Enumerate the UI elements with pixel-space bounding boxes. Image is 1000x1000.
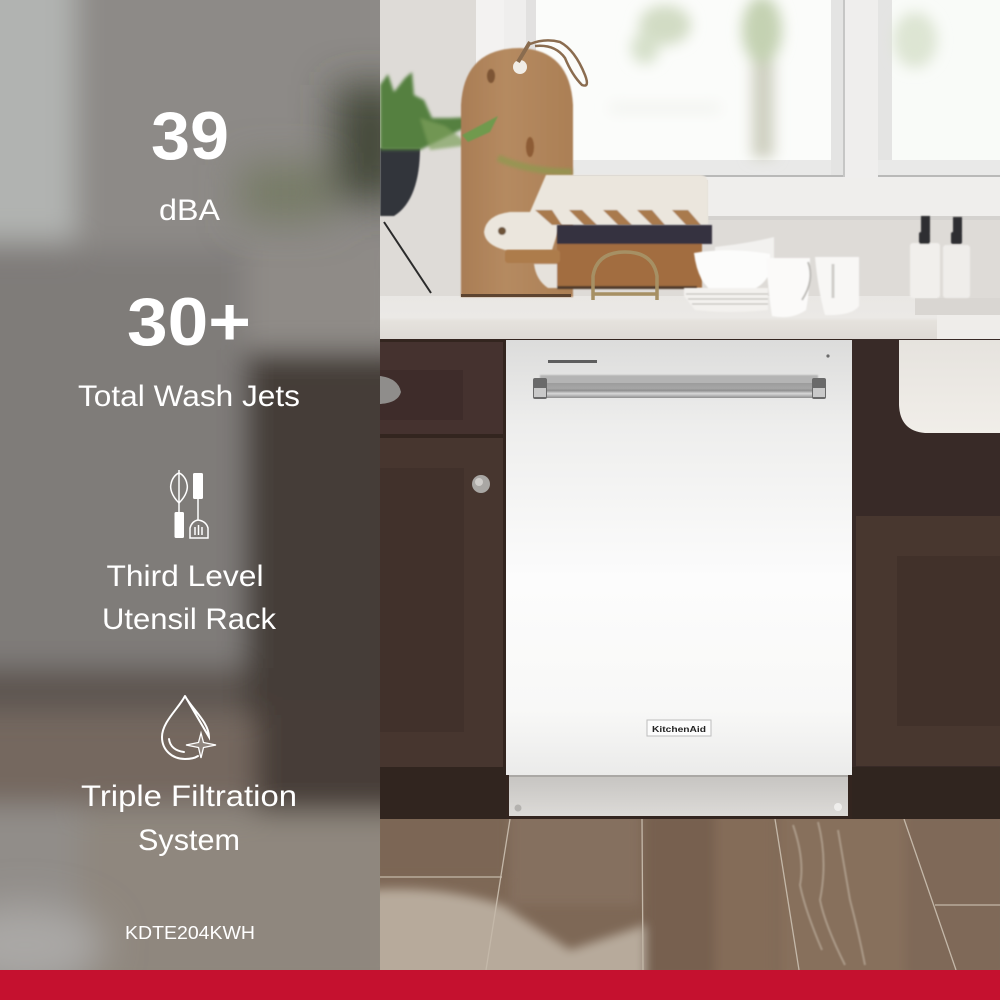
label: System: System [138, 824, 240, 857]
countertop [380, 296, 1000, 340]
window frame [476, 0, 1000, 220]
label: Total Wash Jets: Total Wash Jets [78, 380, 300, 413]
number: 30+: 30+ [127, 284, 251, 360]
feature: Third Level Utensil Rack [102, 470, 277, 636]
plant and pot [380, 71, 462, 294]
farmhouse sink [899, 340, 1000, 433]
soap bottles [910, 216, 970, 298]
label: Utensil Rack: Utensil Rack [102, 603, 277, 636]
window panes with blurred garden [536, 0, 1000, 160]
dishes [684, 237, 859, 317]
feature: Triple Filtration System [81, 696, 297, 857]
red footer bar [0, 970, 1000, 1000]
panel: frosted left sidebar [0, 0, 380, 970]
toe panel [509, 775, 848, 816]
lower cabinet backing [380, 339, 852, 819]
kitchen photo [370, 0, 1000, 985]
handle [533, 375, 826, 399]
stat: 39 dBA [151, 98, 229, 227]
marble board [484, 175, 708, 250]
pot stand [384, 222, 431, 293]
brass stand [593, 252, 657, 300]
label: Third Level: Third Level [106, 560, 264, 593]
fern [380, 71, 462, 152]
right cabinet [856, 516, 1000, 766]
wood floor [380, 819, 1000, 970]
number: 39: 39 [151, 98, 229, 174]
wall [380, 0, 1000, 310]
KitchenAid badge [647, 720, 711, 736]
label: dBA: dBA [159, 194, 220, 227]
label: Triple Filtration: Triple Filtration [81, 780, 297, 813]
indicator dot [826, 354, 830, 358]
icon: whisk and spatula [171, 470, 208, 538]
control strip [548, 360, 597, 363]
left cabinets [380, 342, 503, 767]
wooden cutting board [461, 40, 587, 297]
door panel [506, 340, 852, 775]
slate and wood paddle boards [505, 225, 712, 289]
model number: KDTE204KWH [125, 923, 255, 943]
dishwasher [506, 340, 852, 816]
icon: water drop with sparkle [162, 696, 216, 759]
stat: 30+ Total Wash Jets [78, 284, 300, 413]
KitchenAid badge: KitchenAid [652, 724, 706, 734]
